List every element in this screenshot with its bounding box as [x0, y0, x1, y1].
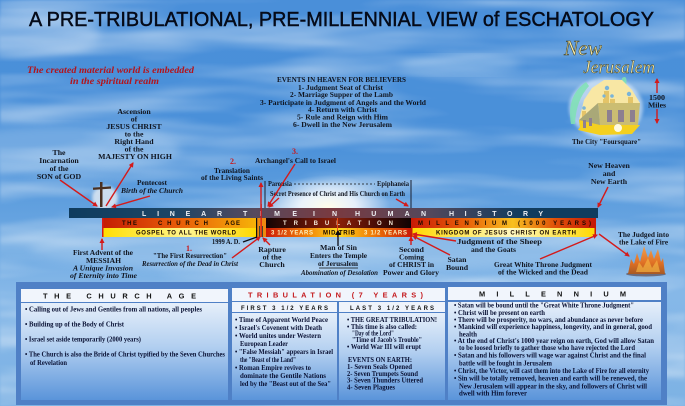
glow: second coming light	[266, 175, 390, 239]
label: rapture: of the	[263, 252, 282, 262]
label: parousia and epiphaneia: Secret Presence of Christ and His Church on Earth	[270, 189, 406, 198]
timeline: tribulation	[266, 218, 411, 237]
heading: the church age	[21, 289, 228, 302]
panel frame	[16, 282, 667, 405]
label: incarnation: The	[52, 148, 66, 157]
subpanel: first 3 1/2 years: • Time of Apparent World Peace	[235, 315, 329, 324]
heading: tribulation 7 years: TRIBULATION (7 YEARS)	[248, 290, 424, 300]
millennium bullets: • Satan and his followers will wage war against Christ and the final	[454, 350, 646, 360]
timeline: tribulation: 3 1/2 YEARS	[271, 230, 313, 236]
subpanel: last 3 1/2 years: • THE GREAT TRIBULATION!	[347, 315, 437, 324]
label: man of sin	[300, 243, 378, 277]
label: rapture: Church	[259, 260, 285, 269]
timeline: church age: AGE	[225, 221, 240, 227]
timeline: church age: THE	[122, 221, 137, 227]
label: first advent: A Unique Invasion	[72, 264, 133, 272]
subpanel: first 3 1/2 years: dominate the Gentile Nations	[240, 371, 326, 380]
label: man of sin: Enters the Temple	[310, 251, 367, 260]
label: incarnation: Incarnation	[39, 156, 79, 165]
church age bullets: • Building up of the Body of Christ	[25, 320, 124, 329]
label: translation of saints	[201, 157, 263, 182]
label: 1999 A.D.: 1999 A. D.	[212, 237, 240, 246]
subpanel: first 3 1/2 years: • World unites under Western	[235, 331, 321, 340]
text block: events in heaven: EVENTS IN HEAVEN FOR BELIEVERS	[277, 75, 406, 84]
subpanel: last 3 1/2 years: • This time is also called:	[347, 322, 417, 331]
subpanel: last 3 1/2 years: 4- Seven Plagues	[347, 382, 395, 392]
subpanel: last 3 1/2 years: "Day of the Lord"	[352, 328, 394, 338]
text block: events in heaven: 6- Dwell in the New Jerusalem	[293, 120, 392, 129]
label: lake of fire: The Judged into	[618, 230, 669, 239]
label: new heaven and earth	[588, 161, 631, 186]
label: satan bound: Bound	[446, 263, 469, 272]
text block: events in heaven	[260, 75, 427, 129]
millennium bullets: to be loosed briefly to gather those who have rejected the Lord	[459, 343, 636, 352]
millennium bullets: • Mankind will experience happiness, longevity, and in general, good	[454, 322, 653, 331]
label: second coming: Coming	[399, 252, 424, 262]
subpanel: first 3 1/2 years: led by the "Beast out of the Sea"	[240, 379, 331, 388]
label: lake of fire: the Lake of Fire	[619, 238, 668, 246]
heading: millennium: MILLENNIUM	[479, 290, 626, 298]
panel: the church age	[21, 289, 228, 400]
label: first advent: First Advent of the	[73, 248, 134, 257]
church age bullets: • Israel set aside temporarily (2000 years)	[25, 335, 141, 344]
label: ascension: Ascension	[117, 107, 151, 116]
timeline: millennium	[411, 218, 596, 237]
timeline: tribulation: TRIBULATION	[283, 221, 393, 227]
heading: New Jerusalem	[563, 36, 655, 77]
label: man of sin: Man of Sin	[320, 243, 358, 252]
timeline: linear time bar	[69, 208, 598, 218]
timeline: millennium: MILLENNIUM	[418, 221, 507, 227]
label: great white throne: of the Wicked and the Dead	[498, 268, 589, 276]
label: first resurrection	[141, 244, 239, 268]
label: parousia and epiphaneia: Epiphaneia	[377, 179, 409, 188]
label: satan bound	[446, 255, 469, 272]
subpanel: first 3 1/2 years: • Roman Empire revives to	[235, 363, 311, 372]
label: second coming: Second	[399, 245, 425, 254]
label: first resurrection: "The First Resurrection"	[153, 251, 227, 260]
timeline	[69, 204, 598, 237]
label: ascension: MAJESTY ON HIGH	[98, 152, 172, 161]
millennium bullets	[454, 300, 654, 398]
label: first advent: of Eternity into Time	[70, 271, 138, 280]
label: first advent: MESSIAH	[86, 256, 121, 265]
dimension: 1500 miles: 1500	[649, 93, 665, 102]
label: archangel's call: Archangel's Call to Israel	[255, 156, 337, 165]
subpanel: last 3 1/2 years: 3- Seven Thunders Uttered	[347, 376, 424, 384]
timeline: linear time bar: LINEAR	[142, 211, 222, 218]
label: translation of saints: of the Living Saints	[201, 173, 263, 182]
millennium bullets: • There will be prosperity, no wars, and abundance as never before	[454, 315, 644, 324]
timeline: church age: GOSPEL TO ALL THE WORLD	[136, 230, 237, 236]
timeline: linear time bar: IN	[313, 211, 337, 218]
label: rapture: Rapture	[258, 245, 286, 254]
heading: tribulation 7 years	[232, 288, 445, 301]
arrows: first advent events	[60, 163, 150, 207]
church age bullets: • The Church is also the Bride of Christ typified by the Seven Churches	[25, 350, 225, 359]
label: parousia and epiphaneia	[265, 179, 411, 208]
subpanel: last 3 1/2 years: LAST 3 1/2 YEARS	[350, 306, 434, 312]
dimension: 1500 miles: Miles	[648, 100, 666, 110]
callout: spiritual realm	[27, 65, 194, 87]
label: ascension: of the	[125, 144, 144, 154]
church age bullets: • Calling out of Jews and Gentiles from all nations, all peoples	[25, 305, 202, 314]
subpanel: last 3 1/2 years: "Time of Jacob's Trouble"	[352, 335, 422, 344]
label: ascension: to the	[125, 130, 144, 138]
icon: cross	[92, 182, 118, 210]
subpanel: last 3 1/2 years: • World War III will erupt	[347, 342, 421, 351]
label: parousia and epiphaneia: Parousia	[268, 179, 292, 188]
label: pentecost	[120, 178, 183, 195]
label: incarnation	[37, 148, 81, 181]
label: lake of fire	[618, 230, 669, 246]
panel: tribulation	[232, 288, 445, 400]
millennium bullets: New Jerusalem will appear in the sky, and followers of Christ will	[459, 381, 647, 390]
subpanel: first 3 1/2 years: FIRST 3 1/2 YEARS	[241, 306, 328, 312]
subpanel: last 3 1/2 years	[339, 302, 445, 400]
label: first advent	[70, 248, 138, 280]
timeline: church age	[102, 218, 256, 237]
text block: events in heaven: 3- Participate in Judgment of Angels and the World	[260, 98, 427, 107]
text block: events in heaven: 1- Judgment Seat of Christ	[298, 83, 383, 92]
timeline: church age: CHURCH	[158, 221, 208, 227]
caption: city foursquare: The City "Foursquare"	[572, 137, 641, 146]
label: great white throne: Great White Throne Judgment	[494, 260, 592, 269]
label: pentecost: Pentecost	[137, 178, 167, 187]
icon: New Jerusalem city	[569, 77, 643, 138]
label: incarnation: of the	[50, 164, 69, 173]
subpanel: first 3 1/2 years: • "False Messiah" appears in Israel	[235, 347, 333, 356]
millennium bullets: • Christ will be present on earth	[454, 308, 545, 317]
label: sheep and goats: and the Goats	[471, 245, 516, 254]
label: new heaven and earth: New Heaven	[588, 161, 631, 170]
subpanel: last 3 1/2 years: 1- Seven Seals Opened	[347, 362, 413, 371]
label: archangel's call: 3.	[292, 147, 298, 156]
timeline: tribulation: MID-TRIB	[323, 230, 356, 236]
millennium bullets: battle will be fought in Jerusalem	[459, 359, 553, 368]
millennium bullets: health	[459, 330, 477, 339]
callout: spiritual realm: in the spiritual realm	[70, 76, 159, 87]
subpanel: first 3 1/2 years: the "Beast of the Land"	[240, 355, 296, 364]
subpanel: first 3 1/2 years: • Israel's Covenent with Death	[235, 323, 322, 332]
icon: lake of fire	[626, 246, 666, 276]
heading: New Jerusalem: Jerusalem	[583, 57, 655, 77]
timeline: linear time bar: HISTORY	[449, 211, 543, 218]
label: second coming: Power and Glory	[383, 268, 439, 277]
text block: events in heaven: 5- Rule and Reign with Him	[297, 112, 388, 122]
arrows: below the timeline	[102, 231, 629, 259]
heading: New Jerusalem: New	[563, 36, 602, 60]
label: incarnation: SON of GOD	[37, 172, 81, 181]
label: ascension: Right Hand	[114, 137, 154, 146]
label: satan bound: Satan	[447, 255, 467, 264]
label: ascension: JESUS CHRIST	[106, 122, 162, 131]
millennium bullets: • Satan will be bound until the "Great White Throne Judgment"	[454, 300, 634, 310]
heading: the church age: THE CHURCH AGE	[43, 292, 196, 300]
label: sheep and goats	[457, 237, 543, 254]
label: ascension: of	[131, 114, 138, 124]
text block: events in heaven: 4- Return with Christ	[308, 105, 377, 114]
label: first resurrection: 1.	[186, 244, 192, 253]
label: man of sin: of Jerusalem	[318, 259, 358, 268]
label: archangel's call	[255, 147, 337, 165]
arrows: rapture and epiphaneia	[261, 164, 608, 208]
millennium bullets: • Christ, the Victor, will cast them into the Lake of Fire for all eternity	[454, 366, 649, 375]
dimension: 1500 miles	[648, 79, 666, 123]
label: sheep and goats: Judgment of the Sheep	[457, 237, 543, 246]
label: new heaven and earth: New Earth	[591, 177, 628, 186]
title: A PRE-TRIBULATIONAL, PRE-MILLENNIAL VIEW of ESCHATOLOGY	[29, 9, 654, 31]
subpanel: last 3 1/2 years: EVENTS ON EARTH:	[348, 355, 412, 364]
timeline: rapture gap	[256, 204, 266, 237]
timeline: linear time bar: HUMAN	[355, 211, 426, 218]
text block: events in heaven: 2- Marriage Supper of the Lamb	[290, 90, 394, 99]
subpanel: first 3 1/2 years: European Leader	[240, 339, 289, 348]
label: rapture	[258, 245, 286, 269]
timeline: linear time bar: TIME	[243, 211, 297, 218]
heading: millennium	[448, 287, 661, 300]
label: ascension	[98, 107, 172, 161]
subpanel: first 3 1/2 years	[232, 302, 337, 400]
callout: spiritual realm: The created material world is embedded	[27, 65, 194, 76]
label: man of sin: Abomination of Desolation	[300, 268, 378, 277]
panel: millennium	[448, 287, 661, 400]
label: translation of saints: 2.	[230, 157, 236, 166]
label: second coming: of CHRIST in	[389, 260, 435, 269]
subpanel: last 3 1/2 years: 2- Seven Trumpets Sound	[347, 369, 419, 378]
millennium bullets: • At the end of Christ's 1000 year reign on earth, God will allow Satan	[454, 336, 654, 345]
millennium bullets: dwell with Him forever	[459, 389, 528, 398]
label: new heaven and earth: and	[603, 169, 616, 178]
label: first resurrection: Resurrection of the Dead in Christ	[141, 259, 239, 268]
timeline: tribulation: 3 1/2 YEARS	[364, 230, 407, 236]
label: pentecost: Birth of the Church	[120, 186, 183, 195]
timeline: millennium: (1000 YEARS)	[518, 221, 591, 227]
label: great white throne	[494, 260, 592, 276]
church age bullets	[25, 305, 225, 367]
timeline: millennium: KINGDOM OF JESUS CHRIST ON EARTH	[436, 230, 576, 236]
church age bullets: of Revelation	[30, 358, 67, 367]
label: second coming	[383, 245, 439, 277]
millennium bullets: • Sin will be totally removed, heaven and earth will be renewed, the	[454, 374, 648, 383]
label: translation of saints: Translation	[214, 166, 251, 175]
